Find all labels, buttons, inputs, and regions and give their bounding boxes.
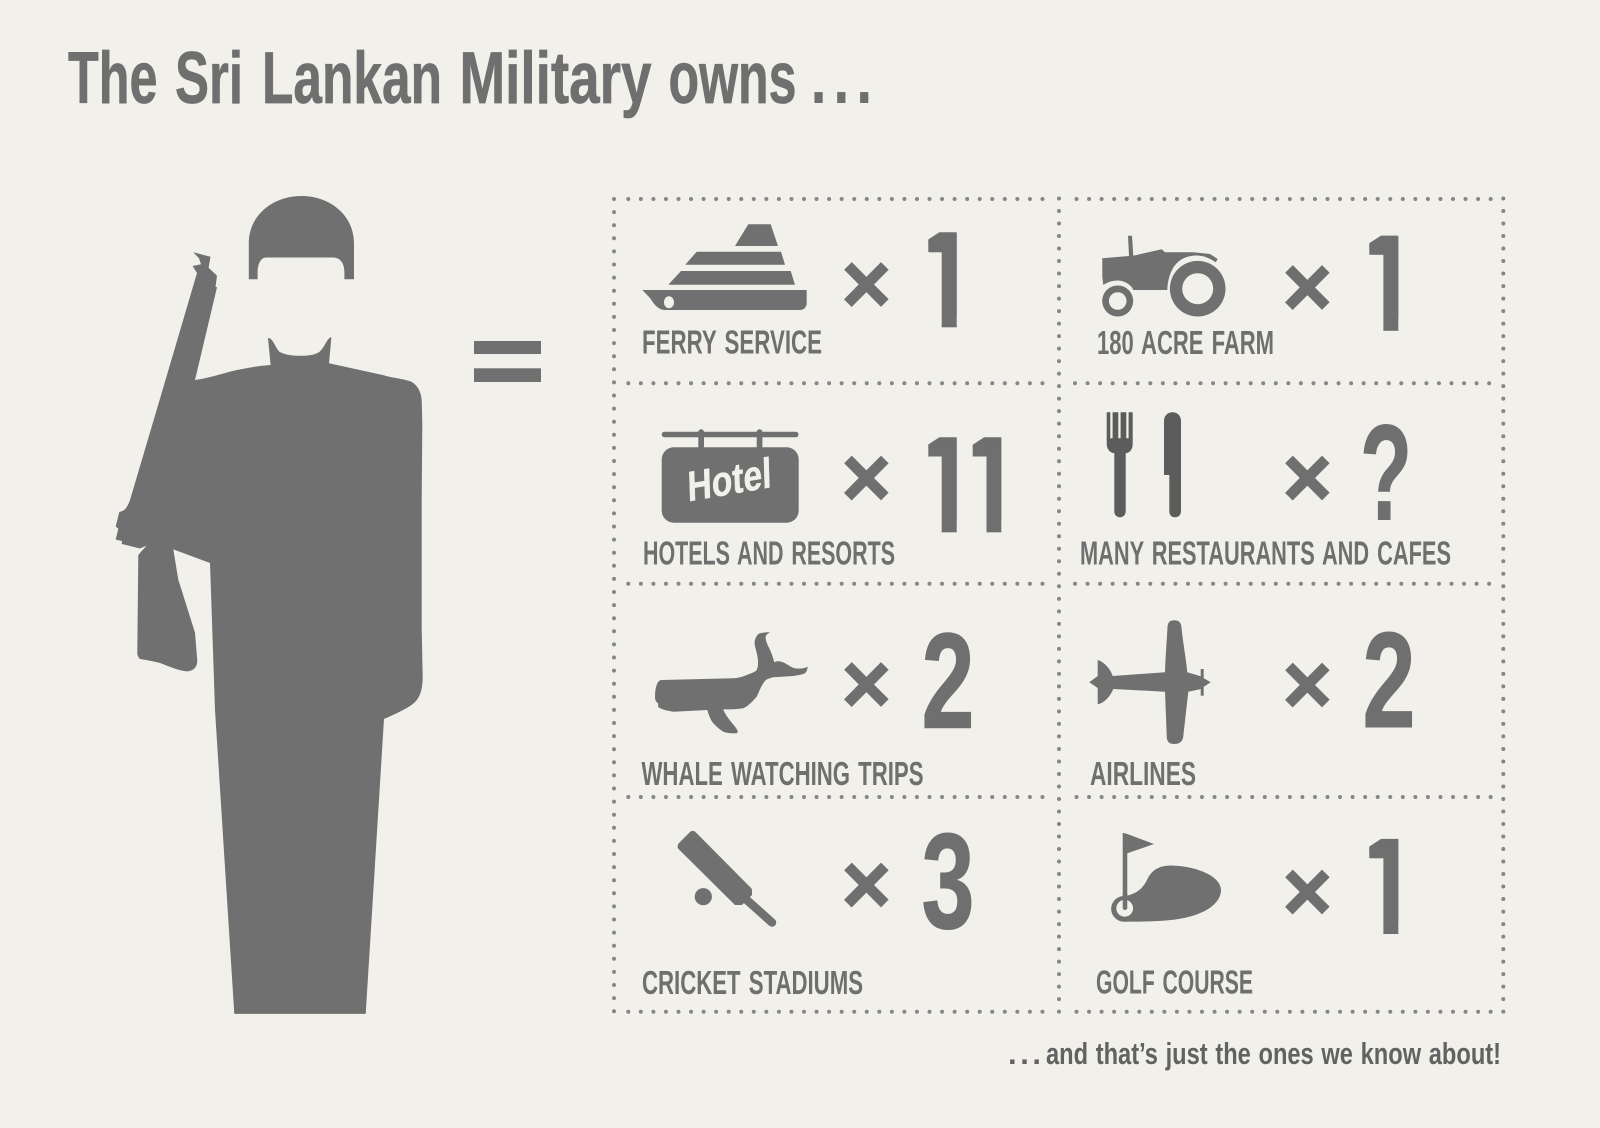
body, arm and rifle	[116, 252, 423, 1014]
count: 3	[922, 805, 974, 957]
icon: cricket bat and ball	[678, 831, 772, 922]
label: GOLF COURSE	[1096, 964, 1253, 1002]
title: The	[68, 38, 158, 119]
sign lettering: Hotel	[687, 449, 772, 511]
title: Sri	[175, 38, 243, 119]
helmet	[249, 196, 354, 279]
label: HOTELS AND RESORTS	[643, 535, 895, 572]
dotted grid	[614, 198, 1503, 1012]
panel: airlines	[1089, 604, 1416, 793]
panel: golf course	[1096, 832, 1398, 994]
count: 1	[1349, 208, 1424, 360]
icon: hotel sign	[662, 429, 799, 523]
multiply sign: ×	[1282, 637, 1332, 732]
icon: fork and knife	[1107, 412, 1181, 517]
panel: hotels and resorts	[644, 429, 1002, 565]
count: 1	[1349, 811, 1424, 963]
soldier silhouette with rifle	[116, 196, 423, 1014]
multiply sign: ×	[841, 430, 891, 525]
title: Lankan	[262, 38, 442, 119]
title: owns	[668, 38, 796, 119]
multiply sign: ×	[1282, 844, 1332, 939]
multiply sign: ×	[841, 838, 891, 933]
icon: golf green and flag	[1111, 833, 1221, 922]
footnote: ...	[1008, 1036, 1045, 1071]
label: CRICKET STADIUMS	[642, 965, 863, 1002]
icon: whale	[655, 632, 808, 733]
panel: 180 acre farm	[1098, 236, 1398, 354]
multiply sign: ×	[841, 237, 891, 332]
label: FERRY SERVICE	[642, 324, 822, 361]
panel: ferry service	[642, 224, 957, 354]
question mark: ?	[1360, 396, 1412, 548]
multiply sign: ×	[841, 637, 891, 732]
icon: airplane	[1089, 620, 1211, 744]
icon: tractor	[1102, 236, 1226, 316]
multiply sign: ×	[1282, 240, 1332, 335]
count: 2	[1362, 604, 1416, 756]
equals sign	[474, 341, 541, 382]
label: WHALE WATCHING TRIPS	[642, 756, 924, 793]
count: 2	[922, 605, 974, 757]
title	[68, 38, 879, 120]
count: 1	[907, 204, 983, 356]
label: 180 ACRE FARM	[1097, 325, 1274, 362]
multiply sign: ×	[1282, 431, 1332, 526]
panel: cricket stadiums	[642, 805, 974, 1002]
title: ...	[810, 38, 879, 120]
panel: whale watching trips	[642, 605, 974, 793]
title: Military	[460, 38, 652, 119]
count: 11	[907, 409, 1028, 561]
icon: ferry	[642, 224, 807, 310]
label: AIRLINES	[1090, 756, 1196, 793]
panel: many restaurants and cafes	[1080, 396, 1451, 572]
